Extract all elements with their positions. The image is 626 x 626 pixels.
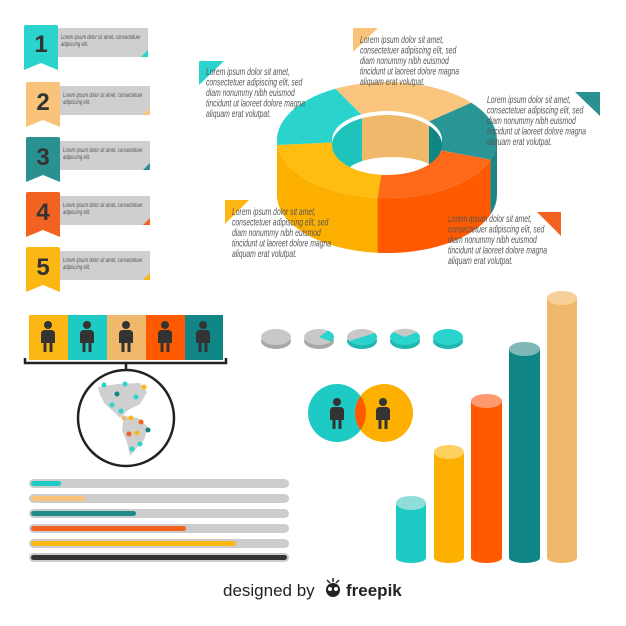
ribbon 1 bbox=[24, 25, 148, 70]
callout 5: aliquam erat volutpat. bbox=[448, 255, 513, 266]
callout 5: diam nonummy nibh euismod bbox=[448, 234, 537, 245]
callout 2: Lorem ipsum dolor sit amet, bbox=[360, 34, 444, 45]
ribbon 5: adipiscing elit. bbox=[63, 264, 90, 271]
ribbon 4: 4 bbox=[36, 199, 50, 226]
callout 4: consectetuer adipiscing elit, sed bbox=[232, 216, 329, 228]
ribbon 4: adipiscing elit. bbox=[63, 209, 90, 216]
3D donut chart bbox=[277, 82, 497, 253]
ribbon 1: 1 bbox=[34, 31, 48, 58]
globe map bbox=[78, 370, 174, 466]
venn people bbox=[308, 384, 413, 442]
ribbon 4 bbox=[26, 192, 150, 237]
bracket bbox=[25, 358, 226, 370]
callout 2: consectetuer adipiscing elit, sed bbox=[360, 44, 457, 56]
callout 1: aliquam erat volutpat. bbox=[206, 108, 271, 119]
callout 4: diam nonummy nibh euismod bbox=[232, 227, 321, 238]
callout 5: tincidunt ut laoreet dolore magna bbox=[448, 244, 547, 256]
donut top segments bbox=[335, 82, 471, 121]
callout 5 bbox=[448, 212, 561, 266]
callout 3: diam nonummy nibh euismod bbox=[487, 115, 576, 126]
ribbon 4: Lorem ipsum dolor sit amet, consectetuer bbox=[63, 202, 143, 209]
ribbon 2: adipiscing elit. bbox=[63, 99, 90, 106]
callout 1: diam nonummy nibh euismod bbox=[206, 87, 295, 98]
people row bbox=[29, 315, 223, 360]
callout 5: Lorem ipsum dolor sit amet, bbox=[448, 213, 532, 224]
callout 2: aliquam erat volutpat. bbox=[360, 76, 425, 87]
callout 5: consectetuer adipiscing elit, sed bbox=[448, 223, 545, 235]
ribbon 5 bbox=[26, 247, 150, 292]
ribbon list bbox=[24, 25, 150, 292]
callout 1: consectetuer adipiscing elit, sed bbox=[206, 76, 303, 88]
footer credit: designed by bbox=[223, 581, 315, 600]
callout 1 bbox=[199, 61, 305, 119]
footer credit bbox=[223, 578, 402, 600]
footer credit: freepik bbox=[346, 581, 402, 600]
callout 3: consectetuer adipiscing elit, sed bbox=[487, 104, 584, 116]
callout 3: aliquam erat volutpat. bbox=[487, 136, 552, 147]
callout 3 bbox=[487, 92, 600, 147]
cylinder bar chart bbox=[396, 291, 577, 563]
ribbon 3: adipiscing elit. bbox=[63, 154, 90, 161]
callout 3: tincidunt ut laoreet dolore magna bbox=[487, 125, 586, 137]
callout 1: Lorem ipsum dolor sit amet, bbox=[206, 66, 290, 77]
callout 4: tincidunt ut laoreet dolore magna bbox=[232, 237, 331, 249]
ribbon 1: adipiscing elit. bbox=[61, 41, 88, 48]
ribbon 5: Lorem ipsum dolor sit amet, consectetuer bbox=[63, 257, 143, 264]
ribbon 2 bbox=[26, 82, 150, 127]
ribbon 2: Lorem ipsum dolor sit amet, consectetuer bbox=[63, 92, 143, 99]
callout 4: aliquam erat volutpat. bbox=[232, 248, 297, 259]
callout 3: Lorem ipsum dolor sit amet, bbox=[487, 94, 571, 105]
ribbon 3 bbox=[26, 137, 150, 182]
callout 4: Lorem ipsum dolor sit amet, bbox=[232, 206, 316, 217]
donut hole bbox=[332, 115, 442, 175]
ribbon 3: Lorem ipsum dolor sit amet, consectetuer bbox=[63, 147, 143, 154]
ribbon 1: Lorem ipsum dolor sit amet, consectetuer bbox=[61, 34, 141, 41]
ribbon 3: 3 bbox=[36, 144, 50, 171]
callout 2: diam nonummy nibh euismod bbox=[360, 55, 449, 66]
progress bars bbox=[29, 479, 289, 562]
callout 2: tincidunt ut laoreet dolore magna bbox=[360, 65, 459, 77]
callout 1: tincidunt ut laoreet dolore magna bbox=[206, 97, 305, 109]
ribbon 2: 2 bbox=[36, 89, 50, 116]
donut side walls bbox=[490, 140, 497, 215]
pie progress discs bbox=[261, 329, 463, 349]
callout 2 bbox=[353, 28, 459, 87]
callout 4 bbox=[225, 200, 331, 259]
icon: freepik logo bbox=[326, 578, 340, 597]
ribbon 5: 5 bbox=[36, 254, 50, 281]
